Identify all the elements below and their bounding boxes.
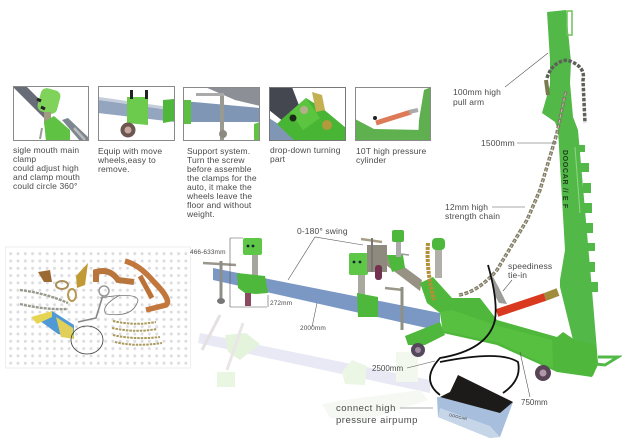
labels: pressure airpump bbox=[336, 415, 418, 426]
caption: support system: Turn the screw bbox=[187, 155, 245, 165]
icon: clamps bbox=[38, 261, 168, 310]
caption: move wheels: wheels,easy to bbox=[97, 155, 156, 165]
labels: tie-in bbox=[508, 270, 527, 280]
caption: drop-down turning part: part bbox=[270, 154, 286, 164]
icon: chains bbox=[20, 290, 68, 309]
base frame bbox=[405, 277, 618, 381]
caption: 10T cylinder bbox=[356, 146, 427, 165]
caption: support system: wheels leave the bbox=[186, 191, 252, 201]
panel: accessories on pegboard bbox=[6, 247, 190, 368]
air pump: DOOCAR bbox=[449, 412, 468, 421]
photo: move wheels bbox=[98, 86, 175, 141]
clamp 2 bbox=[349, 253, 378, 317]
logo: DOOCAR // E F bbox=[561, 150, 568, 209]
icon: lifting sling bbox=[31, 311, 74, 339]
labels: 2500mm bbox=[372, 364, 403, 373]
icon: wire ropes and hook bbox=[71, 286, 138, 354]
chain bbox=[459, 60, 585, 295]
caption: support system: auto, it make the bbox=[187, 182, 252, 192]
caption: 10T cylinder: 10T high pressure bbox=[356, 146, 427, 156]
caption: single mouth clamp: clamp bbox=[13, 154, 36, 164]
caption: move wheels: remove. bbox=[98, 164, 130, 174]
hoses bbox=[430, 265, 519, 395]
labels: strength chain bbox=[445, 211, 500, 221]
labels: 466-633mm bbox=[190, 249, 226, 256]
upright pull arm bbox=[542, 10, 598, 376]
caption: move wheels: Equip with move bbox=[98, 146, 162, 156]
caption: support system: Support system. bbox=[187, 146, 250, 156]
labels: 750mm bbox=[521, 398, 548, 407]
caption: drop-down turning part bbox=[270, 145, 341, 164]
icon: gold chains bbox=[112, 321, 162, 345]
caption: single mouth clamp: sigle mouth main bbox=[13, 145, 79, 155]
labels: 1500mm bbox=[481, 138, 515, 148]
caption: single mouth clamp: could adjust high bbox=[13, 163, 79, 173]
clamp 1 bbox=[203, 238, 268, 306]
caption: move wheels bbox=[97, 146, 162, 174]
caption: 10T cylinder: cylinder bbox=[356, 155, 386, 165]
labels: 272mm bbox=[270, 300, 292, 307]
photo: support system bbox=[183, 87, 260, 141]
air pump bbox=[437, 375, 513, 438]
photo: 10T cylinder bbox=[355, 87, 431, 141]
quick coupler: speediness tie-in bbox=[492, 275, 507, 304]
labels: pull arm bbox=[453, 97, 484, 107]
hydraulic cylinder: red bbox=[497, 292, 558, 313]
caption: drop-down turning part: drop-down turning bbox=[270, 145, 341, 155]
labels: connect high bbox=[336, 403, 396, 414]
caption: single mouth clamp: could circle 360° bbox=[13, 181, 78, 191]
caption: support system bbox=[186, 146, 257, 219]
labels: 12mm high bbox=[445, 202, 488, 212]
caption: support system: floor and without bbox=[187, 200, 252, 210]
clamp 3 with gold chain bbox=[428, 238, 445, 300]
caption: support system: the clamps for the bbox=[187, 173, 257, 183]
main beam: blue bbox=[213, 268, 440, 331]
photo: drop-down turning part bbox=[269, 87, 346, 141]
labels: speediness bbox=[508, 261, 552, 271]
leader lines bbox=[230, 53, 557, 408]
caption: single mouth clamp: and clamp mouth bbox=[13, 172, 80, 182]
labels bbox=[190, 87, 552, 426]
caption: support system: weight. bbox=[186, 209, 215, 219]
caption: single mouth clamp bbox=[13, 145, 80, 191]
labels: 0-180° swing bbox=[297, 226, 348, 236]
labels: 2000mm bbox=[300, 325, 326, 332]
swing arm bbox=[361, 230, 422, 330]
caption: support system: before assemble bbox=[187, 164, 252, 174]
labels: 100mm high bbox=[453, 87, 501, 97]
ghost reflection of the frame bbox=[198, 315, 430, 422]
teeth bbox=[579, 145, 598, 292]
photo: single mouth main clamp bbox=[13, 86, 89, 141]
